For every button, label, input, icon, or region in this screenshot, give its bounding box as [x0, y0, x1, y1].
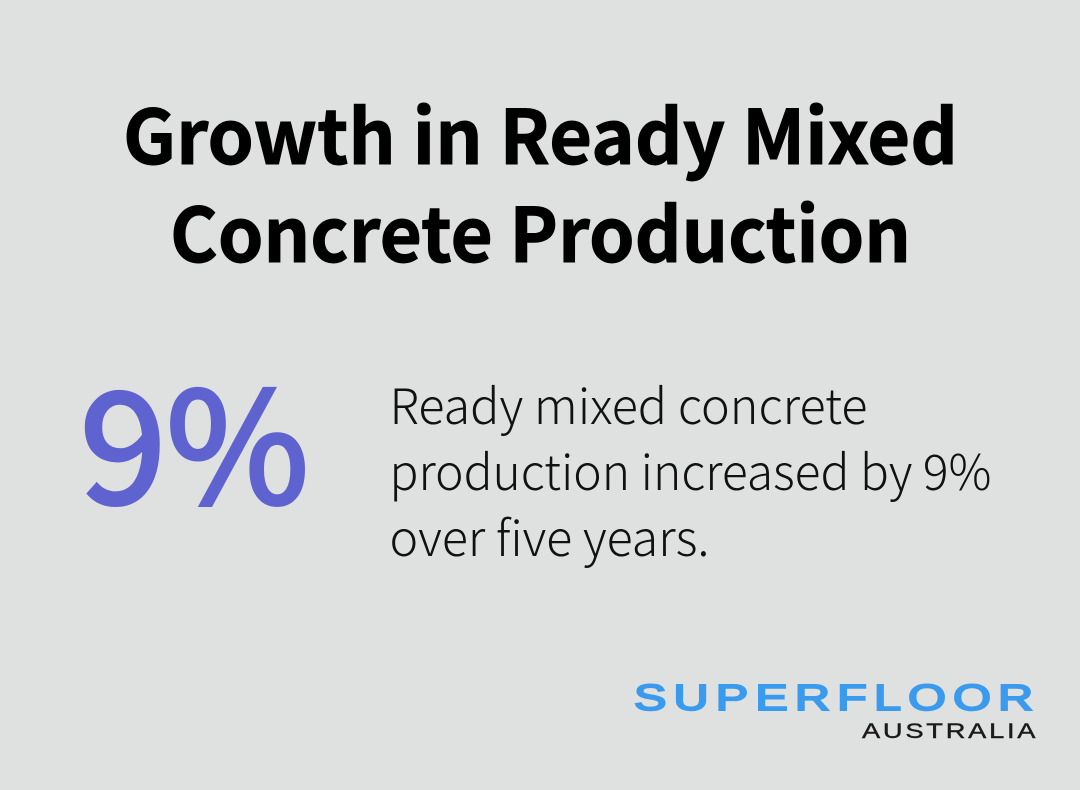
description text [390, 368, 992, 571]
title: Concrete Production [170, 175, 911, 284]
title [123, 77, 958, 284]
description text: production increased by 9% [390, 434, 992, 505]
big statistic: 9%: 9% [80, 327, 309, 548]
description text: Ready mixed concrete [390, 368, 868, 439]
description text: over five years. [390, 500, 710, 571]
logo: Superfloor Australia [634, 678, 1040, 743]
logo subtitle: AUSTRALIA [862, 720, 1038, 743]
title: Growth in Ready Mixed [123, 77, 958, 186]
logo wordmark: SUPERFLOOR [634, 678, 1040, 718]
